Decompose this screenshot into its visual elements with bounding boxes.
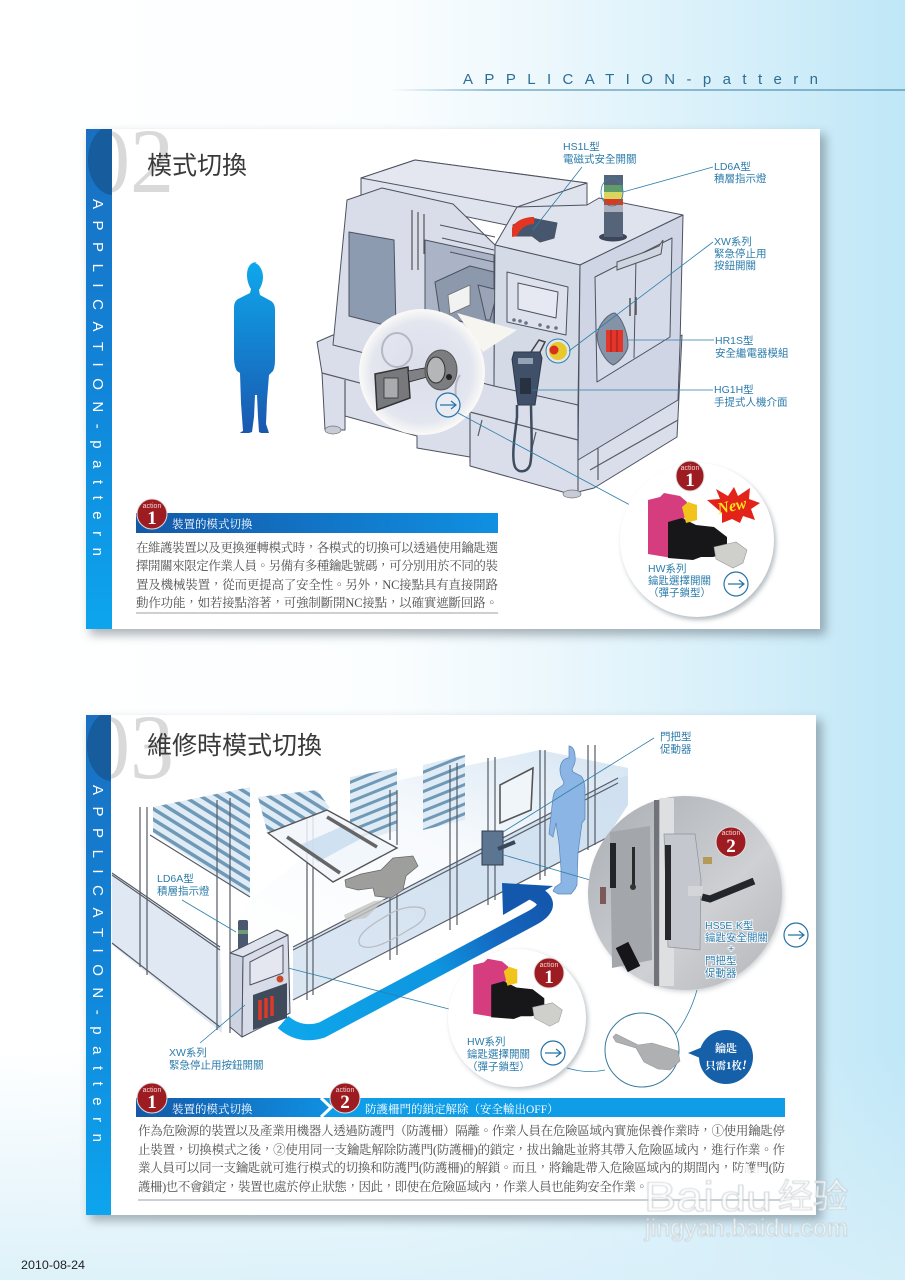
label: HW series: （彈子鎖型） [467,1060,530,1073]
label: LD6A: 積層指示燈 [157,884,210,898]
label: HS1L: HS1L型 [563,141,600,153]
watermark: baidu jingyan: Bai [644,1173,714,1220]
label: XW: 按鈕開關 [714,259,756,272]
icon: baidu paw [732,1164,770,1186]
icon: worker silhouette [549,746,585,894]
body text: 擇開關來限定作業人員。另備有多種鑰匙號碼，可分別用於不同的裝 [136,558,498,573]
label: LD6A: 積層指示燈 [714,172,767,185]
callout lines [182,738,654,1043]
robot with glass panel [268,810,425,947]
machine right face [578,215,683,460]
icon: new starburst: New [715,495,748,518]
control box with tower light [230,920,290,1037]
label: XW: 緊急停止用按鈕開關 [169,1058,264,1072]
section number 02: 02 [86,110,174,212]
icon: inset zoom circle with key switch [359,309,517,435]
label: HS5E-K: + [728,943,734,955]
action bar: two steps: 防護柵門的鎖定解除（安全輸出OFF） [365,1102,559,1116]
label: HR1S: 安全繼電器模組 [715,346,789,360]
action 2 badge: 2 [726,836,736,857]
body text [136,540,498,613]
louvres [153,755,465,897]
date stamp: 2010-08-24 [21,1260,86,1272]
watermark: baidu jingyan [644,1164,848,1242]
action 1 badge: action [540,962,558,969]
icon: XW emergency stop [546,339,570,363]
machine top box [361,160,587,228]
label: HW series: HW系列 [648,563,686,575]
action 1 badge: 1 [147,508,157,529]
product photo: key switch [648,493,747,568]
action bar: two steps: 裝置的模式切換 [172,1102,253,1116]
label: HS1L: 電磁式安全開關 [563,152,636,166]
body text: 護柵)也不會鎖定，裝置也處於停止狀態，因此，即使在危險區域內，作業人員也能夠安全作業。 [138,1179,648,1194]
icon: door handle actuator [482,831,515,865]
label: HG1H: 手提式人機介面 [714,396,788,408]
heading: 模式切換 [147,152,247,180]
icon: LD6A tower light [599,175,627,242]
icon: new starburst [707,487,760,523]
arrow: blue movement path [283,883,553,1032]
action 1 badge: 1 [685,470,695,491]
vertical blue stripe: APPLICATION-pattern [89,199,106,556]
watermark: baidu jingyan: jingyan.baidu.com [644,1215,848,1242]
label: XW: 緊急停止用 [714,247,766,260]
product photo: key switch [473,959,562,1026]
callout bubble: only one key needed: 只需1枚! [705,1057,747,1072]
action 1 badge: 1 [544,967,554,988]
action 1 badge [137,1083,167,1113]
action 2 badge [716,827,746,857]
callout bubble: only one key needed [688,1030,753,1084]
right wall [293,775,628,1000]
icon: arrow in circle [436,393,460,417]
action 1 badge [676,461,704,491]
icon: arrow in circle [724,572,748,596]
body text: 置及機械裝置，從而更提高了安全性。另外，NC接點具有直接開路 [136,577,498,592]
label: HW series: 鑰匙選擇開關 [467,1048,530,1060]
body text [138,1123,785,1200]
action 1 badge [534,958,564,988]
callout circle: HS5E-K photo [588,796,784,992]
action 1 badge: action [143,1087,161,1094]
label: HW series: HW系列 [467,1036,506,1048]
label: HW series: 鑰匙選擇開關 [648,574,711,587]
panel: 02 mode switching [86,110,826,635]
body text: 在維護裝置以及更換運轉模式時，各模式的切換可以透過使用鑰匙選 [136,540,498,555]
watermark: baidu jingyan: 经验 [778,1178,848,1216]
machine front control face [494,245,580,405]
callout circle: HW key selector [448,949,588,1089]
vertical blue stripe: APPLICATION-pattern [89,785,106,1142]
action 1 badge [137,499,167,529]
action bar: mode switching [136,499,498,533]
icon: HG1H pendant [512,340,545,471]
label: XW: XW系列 [714,236,752,248]
action 2 badge: 2 [340,1092,350,1113]
icon: person silhouette [234,262,275,433]
action 1 badge: action [681,465,699,472]
machine base [317,335,682,494]
callout circle: HW key selector [620,461,776,620]
action bar: two steps [136,1083,785,1117]
section number 03: 03 [86,696,174,798]
action bar: mode switching: 裝置的模式切換 [172,517,253,531]
vertical blue stripe [86,715,111,1215]
action 2 badge: action [336,1087,354,1094]
vertical blue stripe [86,129,112,629]
label: XW: XW系列 [169,1047,207,1059]
icon: HS1L red switch [512,217,557,242]
icon: key in oval with connectors [567,990,697,1087]
product photo: door switch [600,798,754,986]
label: HG1H: HG1H型 [714,384,754,396]
watermark: baidu jingyan: du [720,1178,772,1219]
label: HS5E-K: 促動器 [705,966,737,980]
label: door handle actuator: 門把型 [660,731,692,743]
label: door handle actuator: 促動器 [660,742,692,756]
machine top right face [495,198,683,265]
icon: arrow in circle [541,1041,565,1065]
left wall [112,875,222,1033]
machine left cabinet [333,188,495,386]
label: HR1S: HR1S型 [715,335,754,347]
illustration: machine [317,160,714,505]
panel: 03 maintenance mode switching [86,696,822,1221]
label: HS5E-K: 門把型 [705,954,736,967]
action 2 badge [330,1083,360,1113]
callout lines [458,167,714,505]
callout bubble: only one key needed: 鑰匙 [715,1041,737,1055]
label: LD6A: LD6A型 [714,161,751,173]
icon: HR1S relay [597,313,628,365]
body text: 止裝置，切換模式之後，②使用同一支鑰匙解除防護門(防護柵)的鎖定，拔出鑰匙並將其帶入危險區域內，進行作業。作 [138,1142,785,1157]
action 1 badge: action [143,503,161,510]
illustration: safety fence room [112,738,654,1043]
door with window [500,768,533,823]
body text: 動作功能，如若接點溶著，可強制斷開NC接點，以確實遮斷回路。 [136,595,498,610]
heading: 維修時模式切換 [147,732,322,760]
icon: arrow in circle [784,923,808,947]
body text: 業人員可以同一支鑰匙就可進行模式的切換和防護門(防護柵)的解鎖。而且，將鑰匙帶入危險區域內的期間內，防護門(防 [138,1160,785,1175]
label: LD6A: LD6A型 [157,873,194,885]
action 1 badge: 1 [147,1092,157,1113]
header: application pattern: APPLICATION-pattern [463,71,818,88]
label: HW series: （彈子鎖型） [648,586,711,599]
action 2 badge: action [722,830,740,837]
floor and back area [222,750,628,947]
label: HS5E-K: 鑰匙安全開關 [705,931,768,944]
body text: 作為危險源的裝置以及產業用機器人透過防護門（防護柵）隔離。作業人員在危險區域內實施保養作業時，①使用鑰匙停 [138,1123,785,1138]
label: HS5E-K: HS5E-K型 [705,920,753,932]
